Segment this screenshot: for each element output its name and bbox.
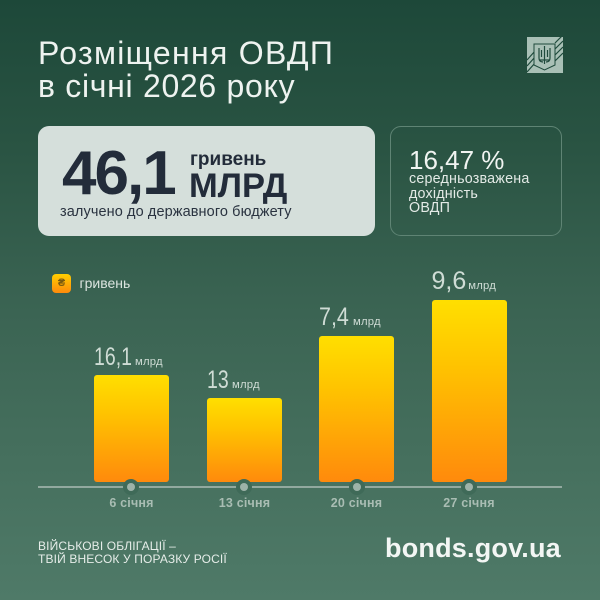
legend: hryvnia xyxy=(52,274,130,293)
axis dot xyxy=(123,479,139,495)
value: 13 xyxy=(207,366,229,394)
date: 27 січня xyxy=(443,496,495,510)
caption: залучено до державного бюджету xyxy=(60,204,292,220)
value: 7,4 xyxy=(319,303,349,331)
value: млрд xyxy=(232,379,260,391)
axis dot xyxy=(236,479,252,495)
title xyxy=(38,35,334,104)
slogan xyxy=(38,538,227,566)
title: в січні 2026 року xyxy=(38,68,295,104)
yield caption: середньозважена xyxy=(409,171,529,187)
title: Розміщення ОВДП xyxy=(38,35,334,71)
axis line xyxy=(38,486,562,488)
bar xyxy=(207,398,282,482)
icon: hryvnia coin: ₴ xyxy=(58,277,65,289)
slogan: ТВІЙ ВНЕСОК У ПОРАЗКУ РОСІЇ xyxy=(38,552,227,566)
bar xyxy=(94,375,169,482)
bar: 13 січня xyxy=(207,366,282,510)
value: 9,6млрд xyxy=(432,267,496,295)
yield caption: дохідність xyxy=(409,186,478,202)
bar: 6 січня xyxy=(94,343,169,510)
big number: 46,1 xyxy=(62,139,175,208)
legend label: гривень xyxy=(80,275,130,291)
value xyxy=(94,343,163,371)
bar: 20 січня xyxy=(319,303,394,510)
bar xyxy=(432,300,506,482)
unit: гривень: гривень xyxy=(190,149,266,170)
bar: 27 січня xyxy=(432,267,507,510)
date: 20 січня xyxy=(331,496,382,510)
axis dot xyxy=(348,479,364,495)
value xyxy=(207,366,260,394)
yield value: 16,47 % xyxy=(409,145,504,175)
value xyxy=(319,303,381,331)
bar xyxy=(319,336,394,482)
panel: yield xyxy=(390,126,562,236)
website: bonds.gov.ua xyxy=(385,533,561,563)
icon: hryvnia coin xyxy=(52,274,71,293)
axis dot xyxy=(461,479,477,495)
date: 6 січня xyxy=(109,496,154,510)
panel: total raised xyxy=(38,126,375,236)
value: млрд xyxy=(353,316,381,328)
yield caption xyxy=(409,171,530,216)
yield caption: ОВДП xyxy=(409,200,450,216)
slogan: ВІЙСЬКОВІ ОБЛІГАЦІЇ – xyxy=(38,538,176,552)
icon: trident emblem xyxy=(527,37,563,73)
value: млрд xyxy=(135,356,163,368)
value: 16,1 xyxy=(94,343,132,371)
date: 13 січня xyxy=(219,496,270,510)
unit: млрд: МЛРД xyxy=(189,167,287,205)
